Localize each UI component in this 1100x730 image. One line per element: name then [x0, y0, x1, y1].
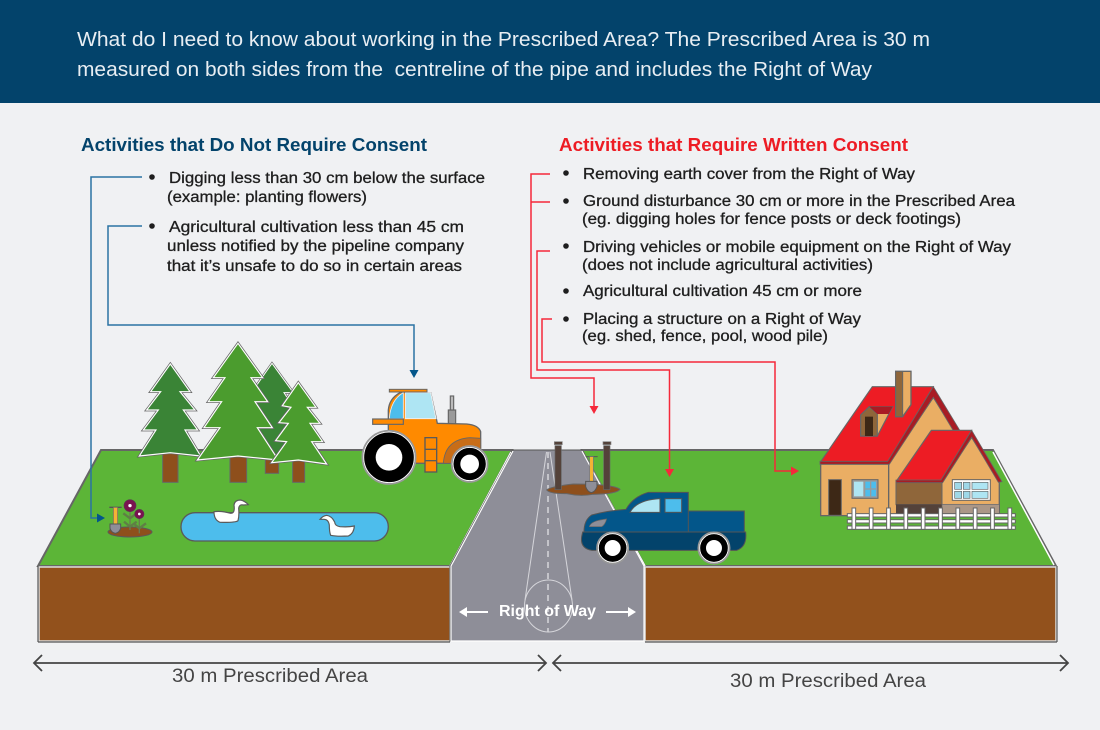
arrow: digging to flowers	[91, 177, 142, 522]
road: right of way	[450, 450, 644, 641]
house: main roof fascia	[820, 387, 960, 464]
house: door	[829, 480, 841, 515]
tree: front right	[272, 383, 327, 482]
house: garage wing	[896, 430, 1002, 514]
list: written consent activities: (does not include agricultural activities)	[582, 257, 873, 274]
ground: left land block	[38, 450, 512, 642]
dimension: left prescribed area: 30 m Prescribed Area	[172, 666, 368, 687]
label: right of way with arrows: Right of Way	[499, 603, 596, 620]
tree: tallest	[197, 343, 278, 482]
white picket fence	[847, 508, 1015, 529]
header banner: What do I need to know about working in the Prescribed Area? The Prescribed Area is 30 m	[77, 29, 930, 51]
list: written consent activities: Placing a structure on a Right of Way	[583, 311, 861, 328]
dimension: left prescribed area	[34, 655, 546, 687]
header banner	[0, 0, 1100, 103]
tree: back dark	[253, 363, 302, 473]
house: window	[852, 480, 878, 498]
house: chimney	[896, 371, 911, 417]
pond with swans	[181, 500, 388, 541]
tractor: front wheel	[452, 446, 488, 482]
trees	[139, 343, 327, 482]
list: no consent activities: unless notified by the pipeline company	[167, 238, 464, 255]
right panel: activities that require written consent	[559, 134, 1015, 345]
list: written consent activities: (eg. shed, fence, pool, wood pile)	[582, 328, 828, 345]
house: dormer	[861, 407, 893, 436]
house: front wall	[821, 464, 889, 516]
swan: left	[214, 500, 248, 522]
header banner: measured on both sides from the centreline of the pipe and includes the Right of Way	[77, 59, 872, 81]
list: written consent activities: Removing earth cover from the Right of Way	[583, 166, 915, 183]
house	[820, 371, 1002, 516]
tree: far left	[139, 364, 201, 482]
list: written consent activities: Ground disturbance 30 cm or more in the Prescribed Area	[583, 193, 1015, 210]
heading: require written consent: Activities that Require Written Consent	[559, 134, 908, 155]
swan: right	[320, 515, 354, 536]
list: written consent activities	[563, 166, 1015, 345]
truck: front wheel	[597, 532, 628, 564]
arrow: structure to house	[542, 319, 799, 476]
ground: right land block	[582, 450, 1057, 642]
heading: do not require consent: Activities that Do Not Require Consent	[81, 134, 427, 155]
label: right of way with arrows	[459, 603, 636, 620]
flowers and shovel	[108, 500, 152, 537]
list: written consent activities: Agricultural cultivation 45 cm or more	[583, 283, 862, 300]
dimension: right prescribed area: 30 m Prescribed Area	[730, 671, 926, 692]
dimension: right prescribed area	[553, 655, 1068, 692]
list: no consent activities: that it’s unsafe to do so in certain areas	[167, 258, 462, 275]
arrow: earth cover and ground disturbance to posts	[531, 174, 598, 414]
list: no consent activities: Agricultural cultivation less than 45 cm	[169, 219, 464, 236]
truck: rear wheel	[698, 532, 730, 564]
list: no consent activities: Digging less than 30 cm below the surface	[169, 170, 485, 187]
arrow: driving to truck	[537, 251, 674, 477]
list: no consent activities	[149, 170, 485, 275]
house: main roof	[821, 387, 933, 462]
arrow: cultivation to tractor	[108, 226, 418, 378]
list: written consent activities: (eg. digging holes for fence posts or deck footings)	[582, 211, 961, 228]
fence posts with dirt and shovel	[547, 442, 620, 495]
list: written consent activities: Driving vehicles or mobile equipment on the Right of Way	[583, 239, 1011, 256]
list: no consent activities: (example: planting flowers)	[167, 189, 367, 206]
pickup truck	[581, 492, 746, 564]
tractor: rear wheel	[362, 431, 416, 484]
house: main gable wall	[888, 397, 963, 514]
tractor	[362, 389, 488, 484]
left panel: activities that do not require consent	[81, 134, 485, 275]
